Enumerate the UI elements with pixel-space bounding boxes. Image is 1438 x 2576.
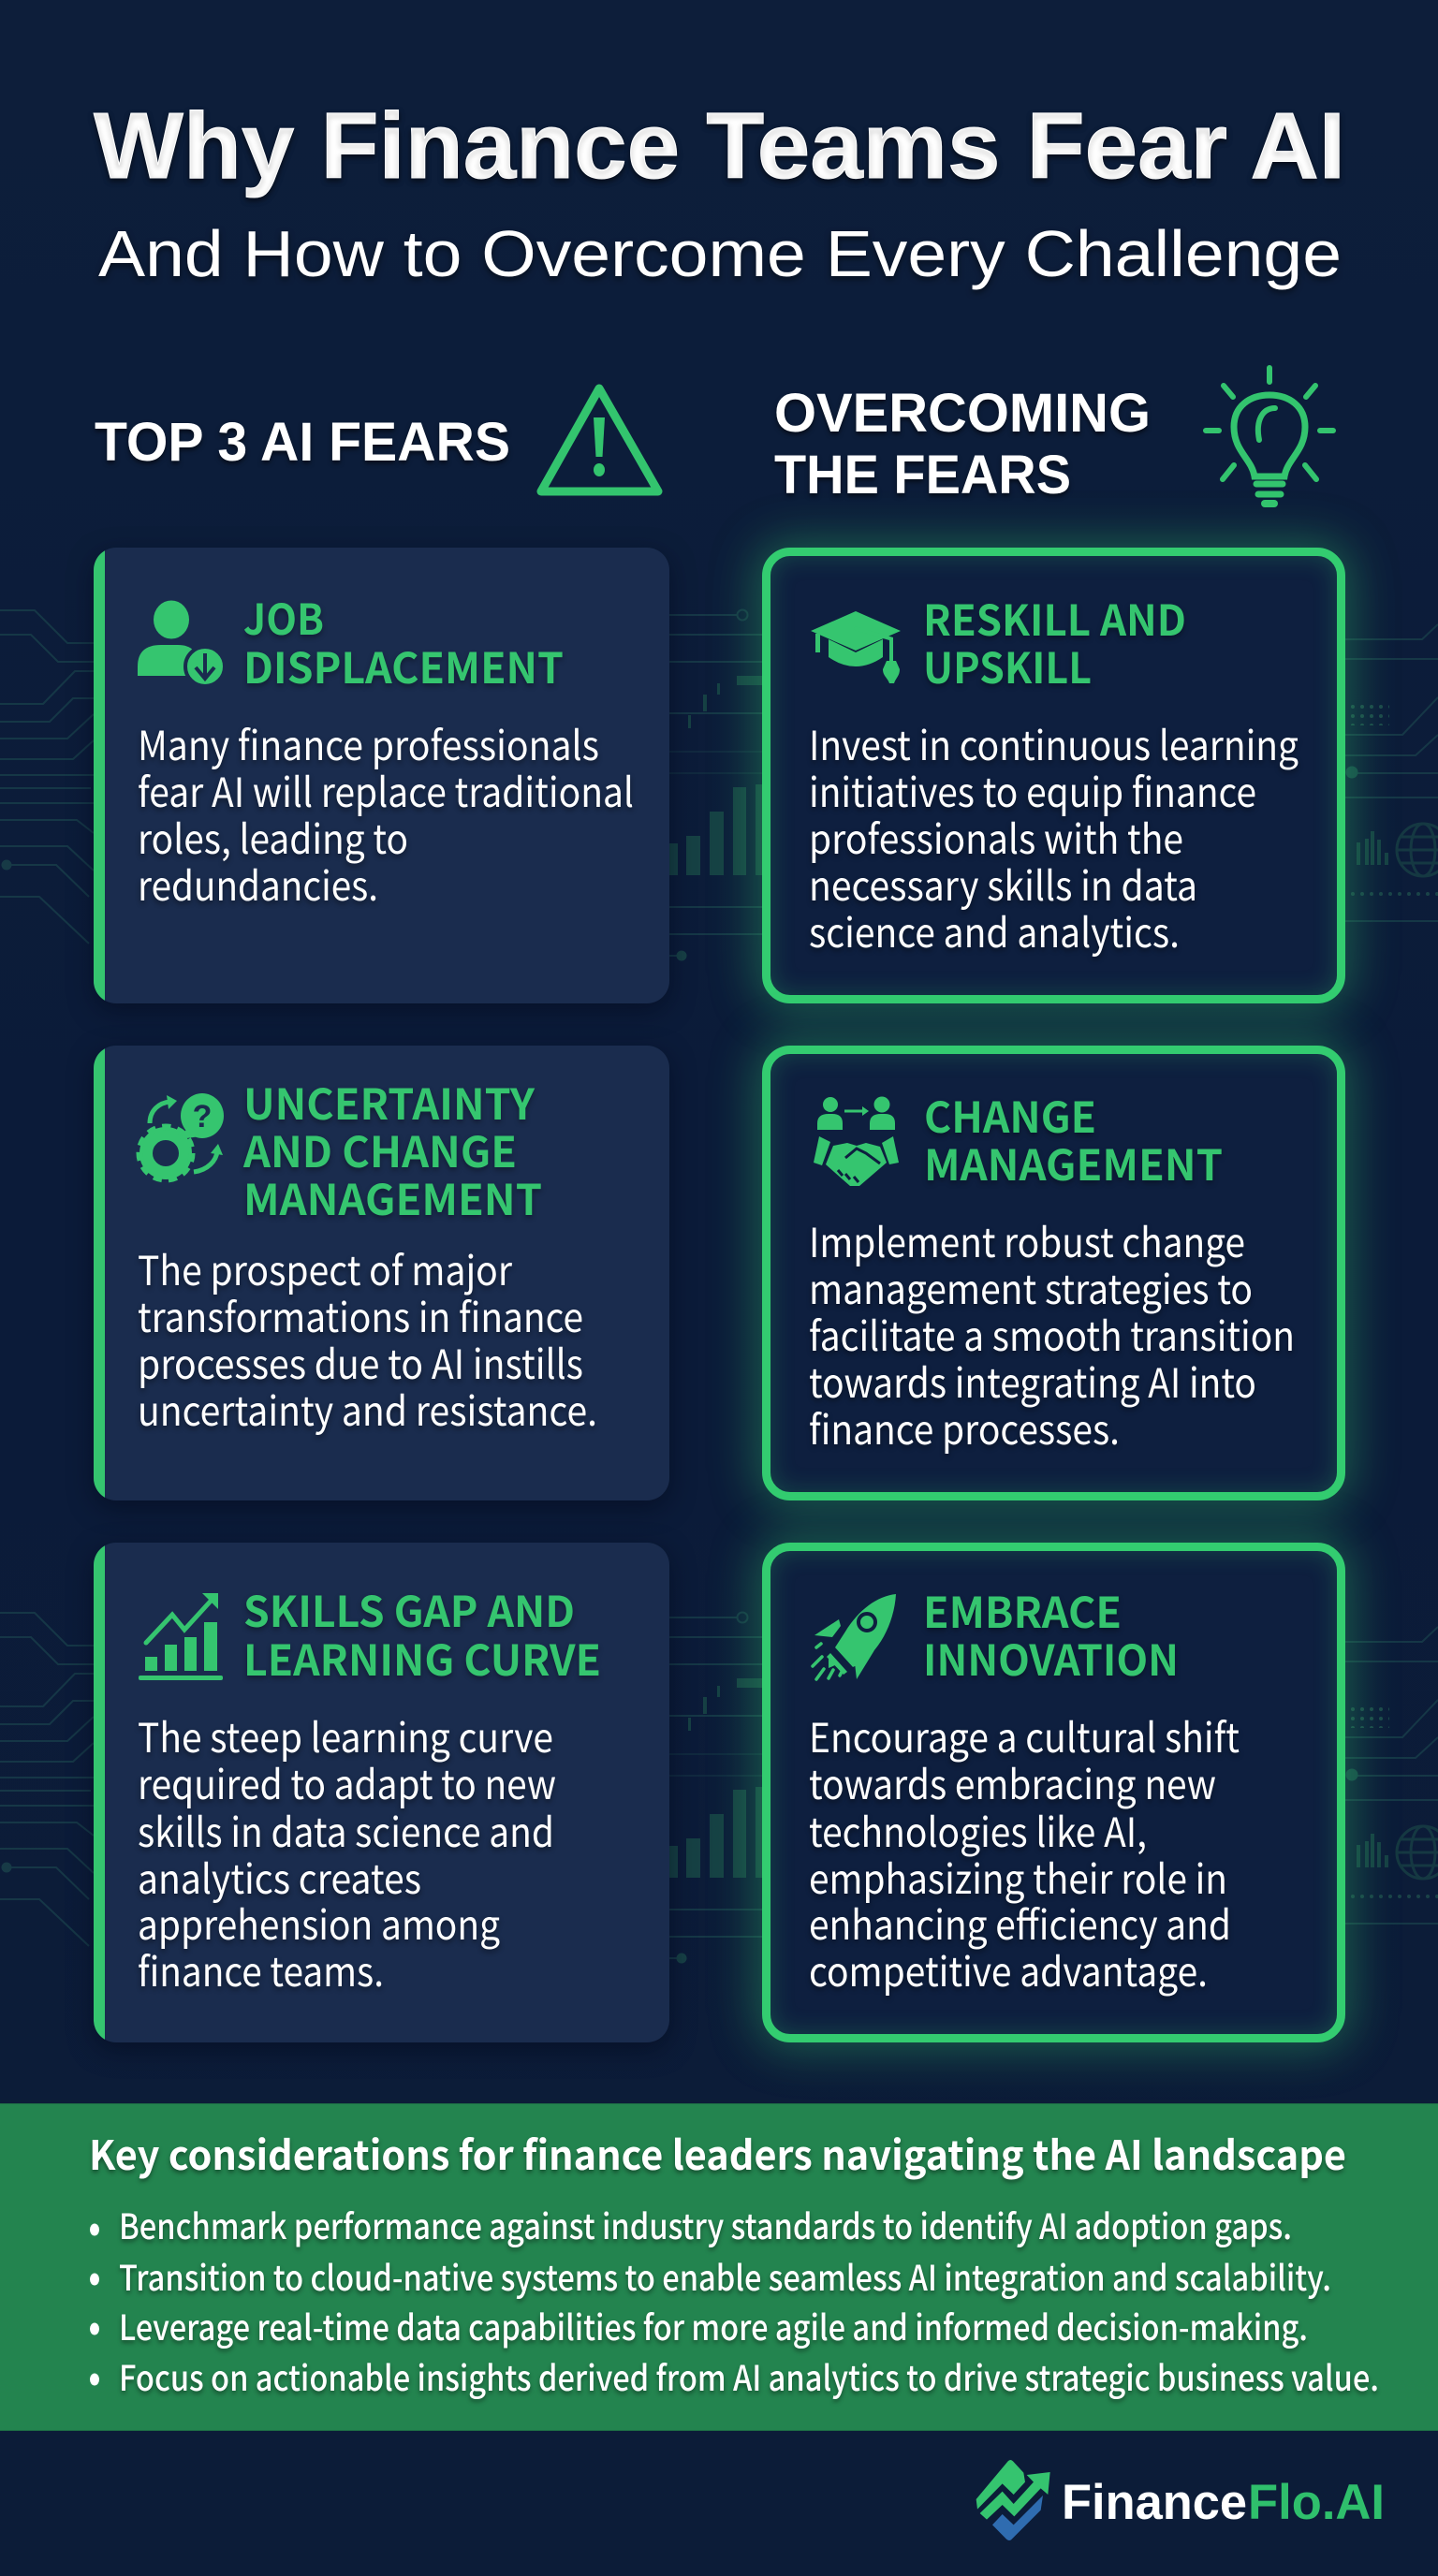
- body text: enhancing efficiency and: [809, 1894, 1231, 1952]
- section header: overcoming the fears: OVERCOMING: [774, 383, 1151, 444]
- icon: rocket: [813, 1594, 896, 1679]
- heading: AND CHANGE: [242, 1119, 517, 1179]
- body text: redundancies.: [138, 855, 378, 913]
- body text: roles, leading to: [138, 808, 408, 866]
- section header: top 3 AI fears: [94, 384, 663, 496]
- heading: UNCERTAINTY: [243, 1071, 536, 1132]
- bullet list: [90, 2199, 1379, 2401]
- panel: reskill and upskill: [762, 548, 1345, 1003]
- heading: [924, 1084, 1223, 1193]
- heading: [243, 1578, 601, 1688]
- icon: warning triangle: [541, 388, 658, 491]
- icon: graduation cap with wrench: [811, 611, 901, 683]
- body text: Many finance professionals: [138, 714, 599, 772]
- bullet list: Leverage real-time data capabilities for more agile and informed decision-making.: [119, 2300, 1308, 2350]
- icon: person with down arrow: [138, 601, 225, 686]
- body text: facilitate a smooth transition: [809, 1305, 1295, 1363]
- panel: uncertainty and change management: [94, 1046, 669, 1500]
- icon: gear with question bubble: ?: [193, 1099, 212, 1134]
- body text: [138, 1706, 556, 1998]
- body text: towards integrating AI into: [809, 1352, 1256, 1410]
- heading: RESKILL AND: [923, 587, 1186, 648]
- title: [92, 94, 1345, 294]
- heading: INNOVATION: [923, 1627, 1179, 1688]
- panel: skills gap and learning curve: [94, 1543, 669, 2042]
- heading: MANAGEMENT: [924, 1132, 1223, 1193]
- heading: [923, 1579, 1179, 1688]
- heading: MANAGEMENT: [243, 1166, 542, 1227]
- heading: EMBRACE: [923, 1579, 1122, 1640]
- subtitle: And How to Overcome Every Challenge: [98, 217, 1342, 290]
- logo: FinanceFlo.AI: [976, 2460, 1385, 2540]
- section header: top 3 AI fears: TOP 3 AI FEARS: [95, 412, 510, 473]
- heading: [923, 587, 1186, 695]
- heading: CHANGE: [924, 1084, 1096, 1145]
- body text: transformations in finance: [138, 1286, 583, 1344]
- panel: change management: [762, 1046, 1345, 1500]
- bullet list: Benchmark performance against industry standards to identify AI adoption gaps.: [119, 2199, 1292, 2249]
- body text: required to adapt to new: [138, 1753, 556, 1811]
- icon: gear with question bubble: [139, 1093, 224, 1179]
- heading: JOB: [243, 586, 324, 647]
- body text: fear AI will replace traditional: [138, 761, 634, 819]
- section header: overcoming the fears: [773, 365, 1336, 507]
- body text: Encourage a cultural shift: [809, 1706, 1240, 1764]
- body text: The prospect of major: [138, 1239, 512, 1297]
- body text: technologies like AI,: [809, 1801, 1147, 1859]
- icon: light bulb: [1206, 368, 1333, 504]
- body text: initiatives to equip finance: [809, 761, 1256, 819]
- icon: growth chart: [139, 1593, 223, 1680]
- panel: embrace innovation: [762, 1543, 1345, 2042]
- heading: SKILLS GAP AND: [243, 1578, 575, 1639]
- body text: competitive advantage.: [809, 1940, 1208, 1998]
- body text: The steep learning curve: [138, 1706, 553, 1764]
- body text: Invest in continuous learning: [809, 714, 1299, 772]
- section header: overcoming the fears: THE FEARS: [774, 445, 1071, 505]
- body text: science and analytics.: [809, 901, 1180, 959]
- heading: UPSKILL: [923, 635, 1092, 695]
- body text: [138, 714, 634, 913]
- body text: emphasizing their role in: [809, 1848, 1227, 1906]
- heading: LEARNING CURVE: [243, 1627, 601, 1688]
- wordmark: Finance: [1062, 2475, 1247, 2530]
- body text: uncertainty and resistance.: [138, 1380, 597, 1438]
- icon: people and handshake: [814, 1097, 899, 1186]
- heading: DISPLACEMENT: [243, 635, 564, 695]
- heading: Key considerations for finance leaders navigating the AI landscape: [89, 2124, 1346, 2182]
- body text: management strategies to: [809, 1258, 1253, 1316]
- heading: [243, 586, 564, 695]
- body text: apprehension among: [138, 1894, 500, 1952]
- body text: [809, 714, 1299, 959]
- body text: towards embracing new: [809, 1753, 1216, 1811]
- body text: Implement robust change: [809, 1211, 1245, 1269]
- body text: skills in data science and: [138, 1801, 554, 1859]
- body text: finance teams.: [138, 1940, 384, 1998]
- body text: finance processes.: [809, 1398, 1120, 1456]
- panel: key considerations band: [0, 2103, 1438, 2431]
- icon: logo mark: [976, 2460, 1050, 2540]
- panel: job displacement: [94, 548, 669, 1003]
- body text: [809, 1211, 1295, 1456]
- logo: FinanceFlo.AI: Flo.AI: [1248, 2475, 1385, 2530]
- main heading: Why Finance Teams Fear AI: [94, 94, 1345, 198]
- body text: [138, 1239, 597, 1438]
- heading: [242, 1071, 542, 1227]
- body text: processes due to AI instills: [138, 1333, 583, 1391]
- body text: professionals with the: [809, 808, 1183, 866]
- body text: necessary skills in data: [809, 855, 1197, 913]
- body text: [809, 1706, 1240, 1998]
- body text: analytics creates: [138, 1848, 421, 1906]
